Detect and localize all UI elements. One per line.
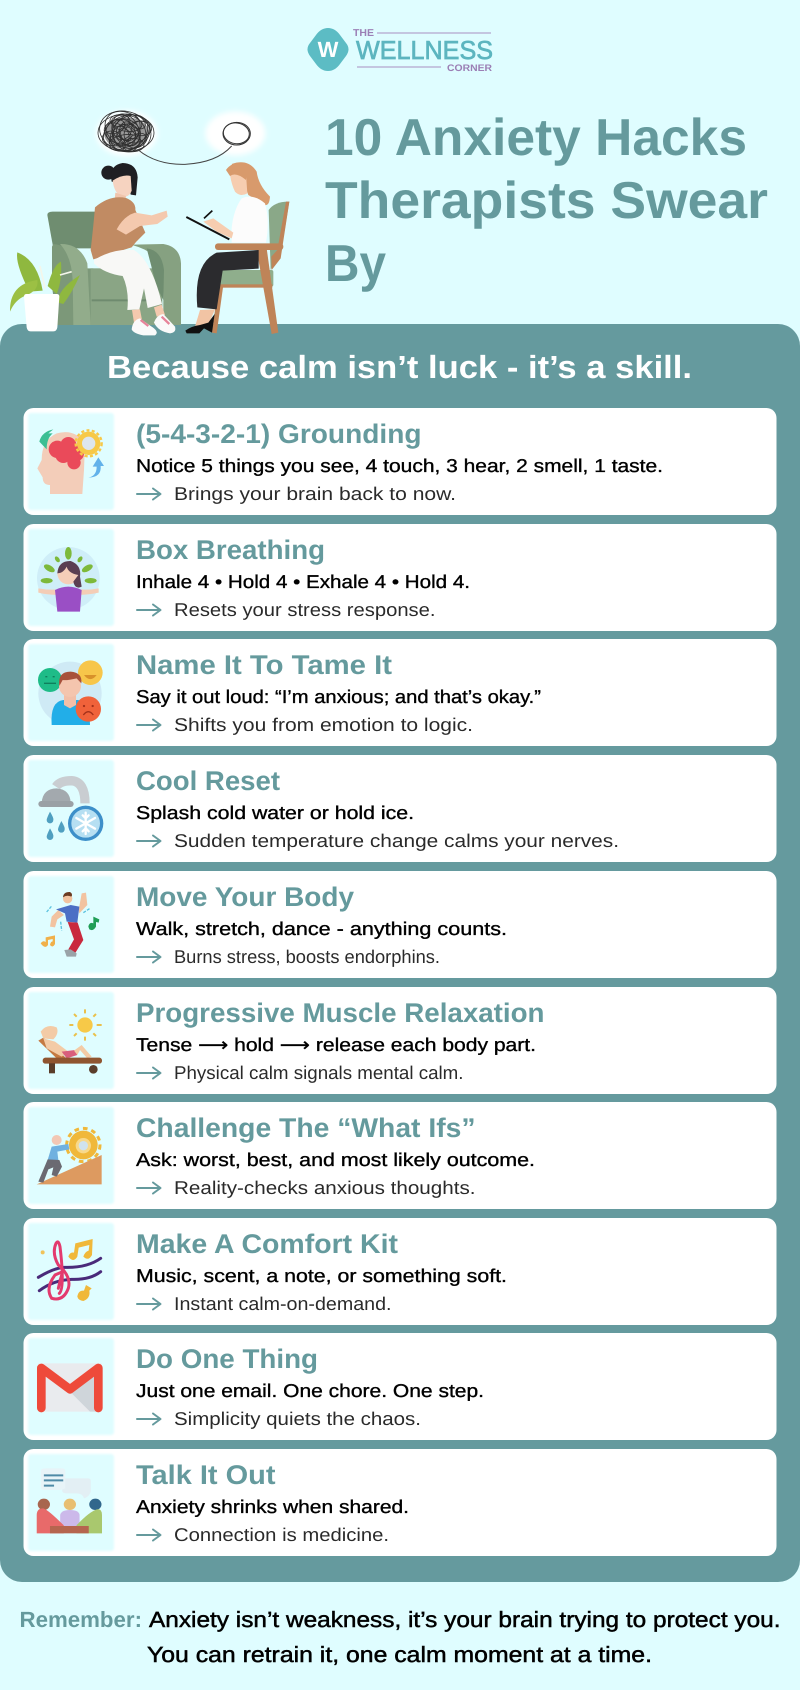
body: Ask: worst, best, and most likely outcome.: [136, 1149, 535, 1170]
logo mark: W: [318, 37, 339, 62]
logo mark: [308, 28, 348, 71]
icon tile: [28, 760, 114, 857]
title: Therapists Swear: [325, 172, 768, 230]
logo: WELLNESS: [356, 35, 493, 65]
takeaway: Simplicity quiets the chaos.: [174, 1408, 421, 1429]
therapist chair: [212, 202, 289, 334]
card 1: grounding: [24, 408, 776, 515]
icon: group conversation: [37, 1468, 102, 1533]
arrow: [137, 720, 160, 730]
card 6: muscle relaxation: [24, 987, 776, 1094]
body: Splash cold water or hold ice.: [136, 802, 414, 823]
heading: Cool Reset: [136, 766, 280, 796]
card background: [24, 1449, 776, 1556]
client: [91, 163, 175, 335]
armchair: [47, 212, 181, 325]
arrow: [137, 604, 160, 616]
card background: [24, 408, 776, 515]
icon: dancer: [41, 892, 99, 957]
icon tile: [28, 529, 114, 626]
thought bubble: clear: [205, 111, 265, 155]
therapist: [185, 162, 270, 333]
card 10: talk it out: [24, 1449, 776, 1556]
body: Tense ⟶ hold ⟶ release each body part.: [136, 1034, 536, 1055]
subtitle: Because calm isn’t luck - it’s a skill.: [107, 349, 692, 385]
icon: emotions: [38, 660, 103, 725]
icon tile: [28, 876, 114, 973]
body: Walk, stretch, dance - anything counts.: [136, 918, 507, 939]
takeaway: Physical calm signals mental calm.: [174, 1062, 464, 1083]
footer message: Remember:: [20, 1607, 142, 1632]
footer message: Anxiety isn’t weakness, it’s your brain trying to protect you.: [149, 1607, 780, 1632]
thought bubble: tangled: [95, 104, 157, 158]
footer message: [20, 1607, 780, 1667]
card background: [24, 987, 776, 1094]
title: 10 Anxiety Hacks: [325, 109, 747, 167]
card 8: comfort kit: [24, 1218, 776, 1325]
heading: Talk It Out: [136, 1460, 276, 1490]
card 5: move your body: [24, 871, 776, 978]
icon tile: [28, 644, 114, 741]
body: Inhale 4 • Hold 4 • Exhale 4 • Hold 4.: [136, 571, 470, 592]
arrow: [137, 1414, 160, 1424]
heading: (5-4-3-2-1) Grounding: [136, 419, 422, 449]
card background: [24, 871, 776, 978]
card 9: do one thing: [24, 1333, 776, 1440]
card background: [24, 755, 776, 862]
takeaway: Connection is medicine.: [174, 1524, 389, 1545]
icon: breathing woman: [37, 547, 100, 612]
takeaway: Reality-checks anxious thoughts.: [174, 1177, 476, 1198]
body: Just one email. One chore. One step.: [136, 1380, 484, 1401]
card 4: cool reset: [24, 755, 776, 862]
heading: Make A Comfort Kit: [136, 1229, 398, 1259]
logo: THE: [353, 28, 374, 39]
icon tile: [28, 413, 114, 510]
icon: pushing a gear uphill: [37, 1128, 102, 1184]
arrow: [137, 1182, 160, 1194]
card background: [24, 524, 776, 631]
illustration: therapy session: [10, 104, 289, 335]
arrow: [137, 1298, 160, 1310]
icon tile: [28, 1223, 114, 1320]
card 3: name it: [24, 639, 776, 746]
footer message: You can retrain it, one calm moment at a time.: [147, 1642, 652, 1667]
icon tile: [28, 992, 114, 1089]
card background: [24, 1333, 776, 1440]
heading: Move Your Body: [136, 882, 354, 912]
takeaway: Burns stress, boosts endorphins.: [174, 946, 440, 967]
card background: [24, 1102, 776, 1209]
title: [325, 109, 768, 293]
card background: [24, 639, 776, 746]
logo: CORNER: [447, 63, 492, 74]
takeaway: Resets your stress response.: [174, 599, 436, 620]
arrow: [137, 1530, 160, 1540]
heading: Progressive Muscle Relaxation: [136, 998, 544, 1028]
body: Notice 5 things you see, 4 touch, 3 hear, 2 smell, 1 taste.: [136, 455, 663, 476]
body: Say it out loud: “I’m anxious; and that’s okay.”: [136, 686, 541, 707]
icon: sun lounger: [38, 1009, 102, 1074]
heading: Challenge The “What Ifs”: [136, 1113, 476, 1143]
arrow: [137, 952, 160, 962]
takeaway: Shifts you from emotion to logic.: [174, 714, 473, 735]
takeaway: Brings your brain back to now.: [174, 483, 456, 504]
logo: [308, 28, 493, 74]
card 7: what ifs: [24, 1102, 776, 1209]
takeaway: Instant calm-on-demand.: [174, 1293, 392, 1314]
teal panel: [0, 324, 800, 1582]
arrow: [137, 1068, 160, 1078]
card 2: box breathing: [24, 524, 776, 631]
arrow: [137, 836, 160, 846]
icon tile: [28, 1454, 114, 1551]
icon tile: [28, 1338, 114, 1435]
body: Anxiety shrinks when shared.: [136, 1496, 409, 1517]
heading: Box Breathing: [136, 535, 325, 565]
heading: Name It To Tame It: [136, 650, 392, 680]
plant: [10, 252, 80, 331]
heading: Do One Thing: [136, 1344, 318, 1374]
icon tile: [28, 1107, 114, 1204]
icon: email: [38, 1363, 102, 1412]
title: By: [325, 235, 386, 293]
icon: shower and snowflake: [38, 781, 103, 841]
icon: brain and gear: [37, 429, 104, 494]
body: Music, scent, a note, or something soft.: [136, 1265, 507, 1286]
card background: [24, 1218, 776, 1325]
arrow: [137, 488, 160, 500]
connecting line: [138, 146, 232, 164]
takeaway: Sudden temperature change calms your nerves.: [174, 830, 619, 851]
icon: music notes: [38, 1239, 101, 1301]
